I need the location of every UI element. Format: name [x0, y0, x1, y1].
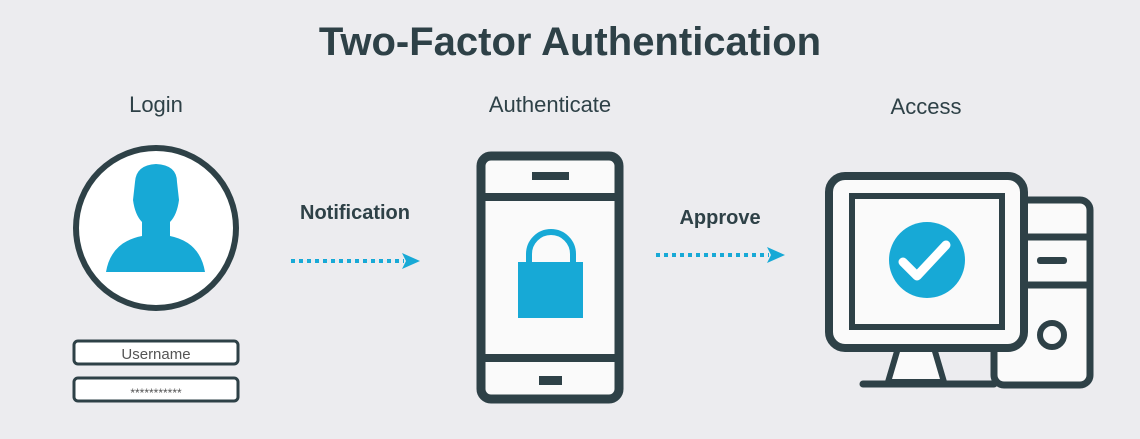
label: Notification: Notification — [300, 202, 410, 224]
arrow: approve — [656, 247, 785, 263]
password field: *********** — [130, 386, 182, 400]
label: Approve: Approve — [679, 207, 761, 229]
username field — [74, 341, 238, 364]
username field: Username — [121, 346, 191, 363]
icon: phone with lock — [481, 156, 619, 399]
icon: computer with check — [829, 176, 1090, 385]
label: Authenticate: Authenticate — [489, 92, 611, 117]
title: Two-Factor Authentication — [319, 20, 821, 64]
label: Login: Login — [129, 92, 183, 117]
password field — [74, 378, 238, 401]
arrow: notification — [291, 253, 420, 269]
label: Access: Access — [891, 94, 961, 119]
icon: user avatar — [76, 148, 236, 308]
